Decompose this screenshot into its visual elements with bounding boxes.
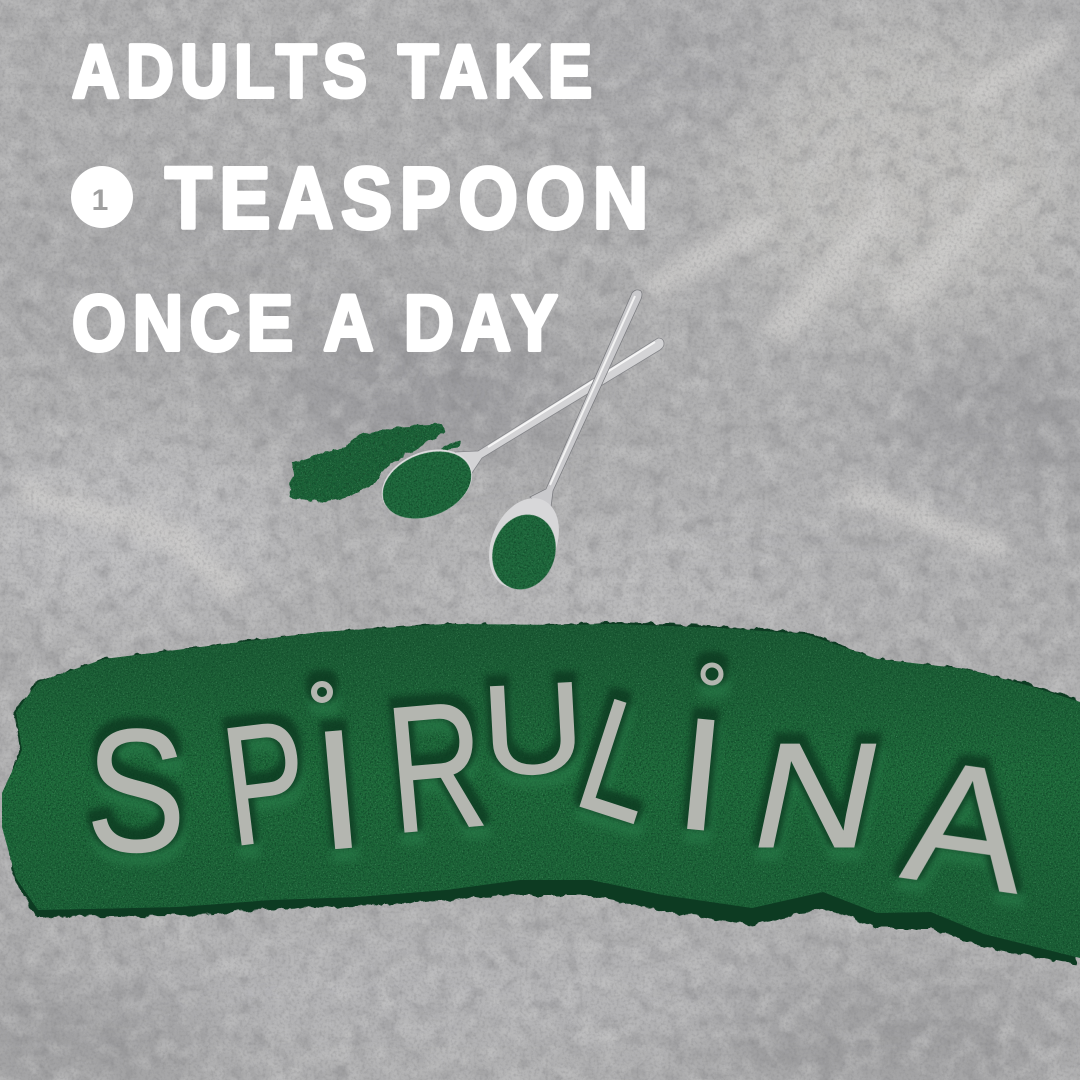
dot of second I [703,665,721,683]
number badge 1: 1 [92,184,108,217]
icon: spoon crossing to the upper right [371,338,664,531]
letter R: R [380,662,493,872]
letter A: A [894,723,1039,931]
heading line 3: ONCE A DAY [72,279,558,367]
dot of first I [314,684,330,700]
heading: dosage instruction [71,29,648,367]
word SPIRULINA written in the powder [86,654,1039,931]
letter P: P [213,685,318,882]
letter N: N [738,713,896,879]
letter L: L [559,663,683,859]
number badge 1 [71,166,133,228]
letter S: S [86,693,186,889]
letter U: U [478,654,588,803]
powder pile on surface [289,424,460,502]
green spirulina powder band [2,622,1080,965]
letter I: I [307,693,370,887]
letter I: I [669,683,733,865]
heading line 2: TEASPOON [165,150,648,247]
icon: spoon pointing upward [476,290,642,599]
heading line 1: ADULTS TAKE [72,29,592,113]
